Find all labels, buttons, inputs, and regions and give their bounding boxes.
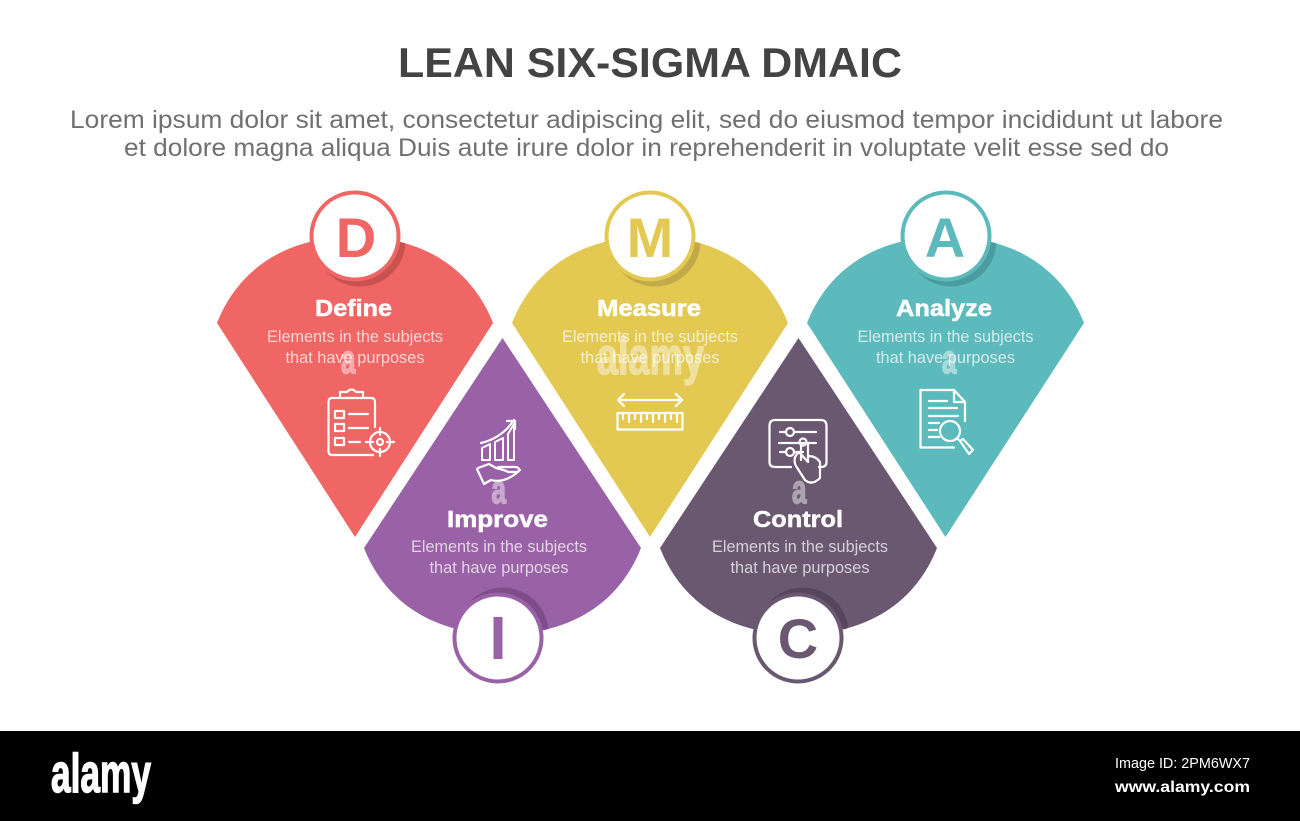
define description: Elements in the subjects bbox=[267, 327, 443, 346]
define petal bbox=[217, 236, 493, 537]
control heading: Control bbox=[753, 506, 843, 532]
measure description bbox=[562, 327, 738, 367]
subtitle text block bbox=[70, 106, 1223, 162]
analyze description bbox=[858, 327, 1034, 367]
watermark: small marks and centre logo: a bbox=[341, 339, 356, 382]
define description: that have purposes bbox=[286, 348, 424, 367]
analyze description: that have purposes bbox=[876, 348, 1015, 367]
define heading: Define bbox=[315, 295, 392, 321]
watermark: small marks and centre logo: alamy bbox=[597, 328, 704, 386]
icon: document with magnifier bbox=[920, 390, 973, 454]
icon: hand with growth chart bbox=[477, 420, 520, 484]
control description: that have purposes bbox=[730, 558, 870, 577]
control petal bbox=[660, 338, 937, 635]
icon: touch control panel bbox=[770, 420, 826, 483]
control description bbox=[712, 537, 888, 577]
image id: Image ID: 2PM6WX7 bbox=[1115, 755, 1250, 772]
panel: analyze bbox=[807, 192, 1084, 537]
subtitle text block: Lorem ipsum dolor sit amet, consectetur adipiscing elit, sed do eiusmod tempor incididunt ut labore bbox=[70, 106, 1223, 134]
control description: Elements in the subjects bbox=[712, 537, 888, 556]
improve letter badge bbox=[454, 594, 542, 682]
analyze letter badge: A bbox=[925, 206, 965, 269]
panel: control bbox=[660, 338, 937, 682]
define letter badge: D bbox=[336, 206, 376, 269]
improve description bbox=[411, 537, 587, 577]
measure letter badge bbox=[606, 192, 694, 280]
improve circle shadow bbox=[469, 588, 548, 630]
panel: define bbox=[217, 192, 493, 537]
footer bar bbox=[0, 731, 1300, 821]
panel: measure bbox=[512, 192, 788, 537]
analyze description: Elements in the subjects bbox=[858, 327, 1034, 346]
improve description: Elements in the subjects bbox=[411, 537, 587, 556]
control letter badge bbox=[754, 594, 842, 682]
control circle shadow bbox=[769, 588, 848, 630]
subtitle text block: et dolore magna aliqua Duis aute irure dolor in reprehenderit in voluptate velit esse sed do bbox=[124, 134, 1169, 162]
measure petal bbox=[512, 236, 788, 537]
watermark: small marks and centre logo: a bbox=[792, 469, 807, 512]
analyze letter badge bbox=[902, 192, 990, 280]
control letter badge: C bbox=[778, 607, 818, 670]
measure letter badge: M bbox=[627, 206, 673, 269]
measure heading: Measure bbox=[597, 295, 701, 321]
title: LEAN SIX-SIGMA DMAIC bbox=[398, 39, 902, 86]
measure circle shadow bbox=[620, 242, 700, 286]
analyze petal bbox=[807, 236, 1084, 537]
measure description: that have purposes bbox=[580, 348, 720, 367]
icon: clipboard with target bbox=[328, 390, 394, 456]
icon: ruler with arrow bbox=[618, 394, 682, 430]
measure description: Elements in the subjects bbox=[562, 327, 738, 346]
watermark: small marks and centre logo: a bbox=[492, 469, 506, 512]
watermark: small marks and centre logo: a bbox=[942, 339, 957, 382]
improve description: that have purposes bbox=[430, 558, 568, 577]
analyze circle shadow bbox=[916, 242, 996, 286]
define circle shadow bbox=[325, 242, 406, 286]
website: www.alamy.com bbox=[1114, 779, 1250, 796]
improve petal bbox=[364, 338, 641, 635]
improve heading: Improve bbox=[447, 506, 548, 532]
define description bbox=[267, 327, 443, 367]
panel: improve bbox=[364, 338, 641, 682]
analyze heading: Analyze bbox=[896, 295, 992, 321]
watermark: small marks and centre logo bbox=[341, 328, 957, 512]
define letter badge bbox=[312, 192, 398, 280]
footer logo: alamy bbox=[51, 742, 151, 804]
